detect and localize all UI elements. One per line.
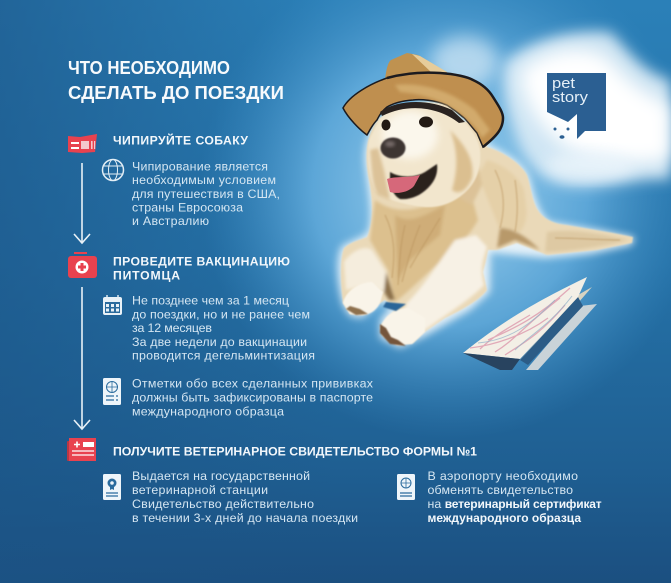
dog fur shading — [344, 135, 628, 330]
logo: pet story — [547, 73, 606, 139]
text: airport exchange: на ветеринарный сертификат — [428, 497, 602, 511]
text: issued at station: Свидетельство действительно — [132, 497, 314, 511]
title — [68, 58, 284, 103]
text: airport exchange: В аэропорту необходимо — [428, 469, 578, 483]
icon: first aid kit — [68, 252, 97, 278]
eyes — [382, 120, 390, 130]
logo: pet story: story — [552, 89, 589, 106]
leg shadow — [383, 302, 406, 311]
white fur halo — [338, 118, 635, 348]
icon: calendar — [103, 295, 122, 315]
fur strokes — [385, 170, 620, 285]
text: vaccination timing: Не позднее чем за 1 месяц — [132, 294, 289, 308]
text: microchipping: и Австралию — [132, 214, 209, 228]
heading: step 3: ПОЛУЧИТЕ ВЕТЕРИНАРНОЕ СВИДЕТЕЛЬСТВО ФОРМЫ №1 — [113, 444, 477, 458]
icon: globe — [102, 160, 124, 180]
hat crown — [385, 53, 448, 98]
text: vaccination timing: За две недели до вакцинации — [132, 335, 307, 349]
text: airport exchange: международного образца — [428, 511, 581, 525]
text: passport marks: Отметки обо всех сделанных прививках — [132, 376, 374, 390]
text: vaccination timing: проводится дегельминтизация — [132, 348, 315, 362]
text: issued at station — [132, 469, 358, 525]
text: passport marks — [132, 376, 374, 418]
arrow 1 — [74, 163, 90, 243]
title: ЧТО НЕОБХОДИМО — [68, 58, 230, 78]
text: vaccination timing — [132, 294, 315, 362]
text: issued at station: ветеринарной станции — [132, 483, 268, 497]
heading: step 1: ЧИПИРУЙТЕ СОБАКУ — [113, 132, 248, 148]
hat brim — [343, 73, 503, 147]
text: passport marks: должны быть зафиксированы в паспорте — [132, 390, 373, 404]
icon: passport — [103, 378, 121, 405]
nose — [380, 138, 406, 158]
text: issued at station: Выдается на государственной — [132, 469, 310, 483]
icon: passport right — [397, 474, 415, 500]
heading: step 2: ПИТОМЦА — [113, 268, 180, 282]
folded map — [463, 277, 597, 370]
icon: microchip — [68, 134, 97, 153]
dog illustration — [338, 102, 635, 348]
text: microchipping: необходимым условием — [132, 173, 276, 187]
text: microchipping: Чипирование является — [132, 160, 268, 174]
head — [368, 102, 480, 207]
tongue — [387, 175, 420, 193]
paws — [343, 282, 425, 345]
text: microchipping: для путешествия в США, — [132, 187, 280, 201]
mouth — [390, 164, 437, 199]
icon: veterinary certificate — [67, 438, 96, 461]
dog body — [341, 118, 633, 345]
arrow 2 — [74, 287, 90, 429]
heading: step 2: ПРОВЕДИТЕ ВАКЦИНАЦИЮ — [113, 254, 290, 268]
text: airport exchange: обменять свидетельство — [428, 483, 573, 497]
text: airport exchange — [428, 469, 602, 525]
text: vaccination timing: до поездки, но и не ранее чем — [132, 308, 310, 322]
heading: step 2 — [113, 254, 290, 282]
text: passport marks: международного образца — [132, 404, 284, 418]
hat — [343, 53, 503, 147]
text: vaccination timing: за 12 месяцев — [132, 321, 212, 335]
title: СДЕЛАТЬ ДО ПОЕЗДКИ — [68, 83, 284, 103]
cloud — [431, 31, 671, 187]
icon: seal document — [103, 474, 121, 500]
text: issued at station: в течении 3-х дней до начала поездки — [132, 511, 358, 525]
text: microchipping: страны Евросоюза — [132, 200, 243, 214]
text: microchipping — [132, 160, 280, 228]
logo: pet story: pet — [552, 75, 576, 92]
